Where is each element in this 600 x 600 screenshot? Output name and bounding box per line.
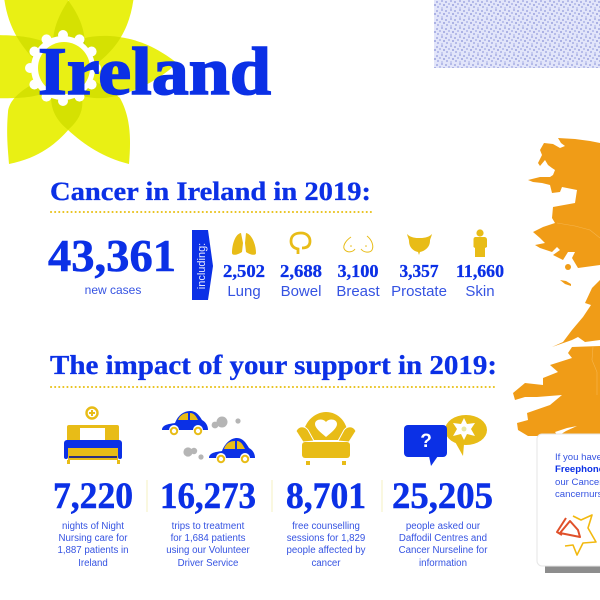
cancer type: bowel — [280, 233, 322, 300]
stat: counselling — [286, 476, 366, 569]
cancer type: bowel: 2,688 — [280, 261, 322, 281]
stat: daffodil centres: Cancer Nurseline for — [399, 545, 488, 556]
stat: trips to treatment: 16,273 — [160, 476, 256, 517]
cancer type: breast: 3,100 — [338, 261, 379, 281]
icon: armchair with heart — [296, 412, 356, 465]
stat: counselling: people affected by — [286, 545, 366, 556]
stat: trips to treatment — [160, 476, 256, 569]
stat: new cases: 43,361 — [48, 231, 176, 281]
cancer type: prostate — [391, 234, 447, 300]
cancer type: breast — [336, 236, 381, 300]
stat: night nursing: 7,220 — [53, 476, 133, 517]
map of Ireland — [513, 138, 600, 436]
cancer type: prostate: Prostate — [391, 283, 447, 300]
cancer type: breast: Breast — [336, 283, 381, 300]
callout card — [537, 434, 600, 573]
daffodil logo — [557, 515, 596, 555]
cancer type: skin: Skin — [465, 283, 495, 300]
stat: night nursing: Nursing care for — [59, 533, 128, 544]
cancer type: lung: 2,502 — [223, 261, 265, 281]
stat: daffodil centres — [392, 476, 493, 569]
cancer type: skin — [456, 229, 504, 300]
cancer type: prostate: 3,357 — [400, 261, 439, 281]
cancer type: skin: 11,660 — [456, 261, 504, 281]
heading: impact of your support: The impact of your support in 2019: — [50, 350, 497, 380]
stat: daffodil centres: information — [419, 558, 467, 569]
stat: trips to treatment: using our Volunteer — [166, 545, 251, 556]
icon: two cars with exhaust — [162, 411, 255, 463]
icon: bed with medical cross — [64, 408, 122, 464]
stat: daffodil centres: 25,205 — [392, 476, 493, 517]
stat: trips to treatment: Driver Service — [178, 558, 238, 569]
stat: night nursing: 1,887 patients in — [57, 545, 129, 556]
stat: new cases: new cases — [85, 283, 141, 297]
including arrow — [192, 230, 213, 300]
icon: speech bubbles — [404, 415, 487, 466]
stat: counselling: free counselling — [292, 521, 360, 532]
stat: night nursing — [53, 476, 133, 569]
stippled dot panel — [434, 0, 600, 68]
stat: daffodil centres: people asked our — [406, 521, 481, 532]
stat: counselling: 8,701 — [286, 476, 366, 517]
stat: night nursing: Ireland — [78, 558, 108, 569]
stat: counselling: cancer — [311, 558, 341, 569]
title: Ireland — [38, 33, 271, 109]
stat: night nursing: nights of Night — [62, 521, 124, 532]
stat: trips to treatment: for 1,684 patients — [171, 533, 246, 544]
cancer type: bowel: Bowel — [281, 283, 321, 300]
heading: cancer in Ireland: Cancer in Ireland in 2019: — [50, 177, 371, 206]
flower corona — [25, 30, 101, 106]
icon: speech bubbles: ? — [420, 431, 432, 452]
cancer type: lung — [223, 233, 265, 300]
daffodil background flower — [0, 0, 177, 164]
stat: counselling: sessions for 1,829 — [287, 533, 365, 544]
stat: daffodil centres: Daffodil Centres and — [399, 533, 487, 544]
cancer type: lung: Lung — [227, 283, 261, 300]
including arrow: including: — [196, 243, 208, 289]
stat: trips to treatment: trips to treatment — [172, 521, 245, 532]
